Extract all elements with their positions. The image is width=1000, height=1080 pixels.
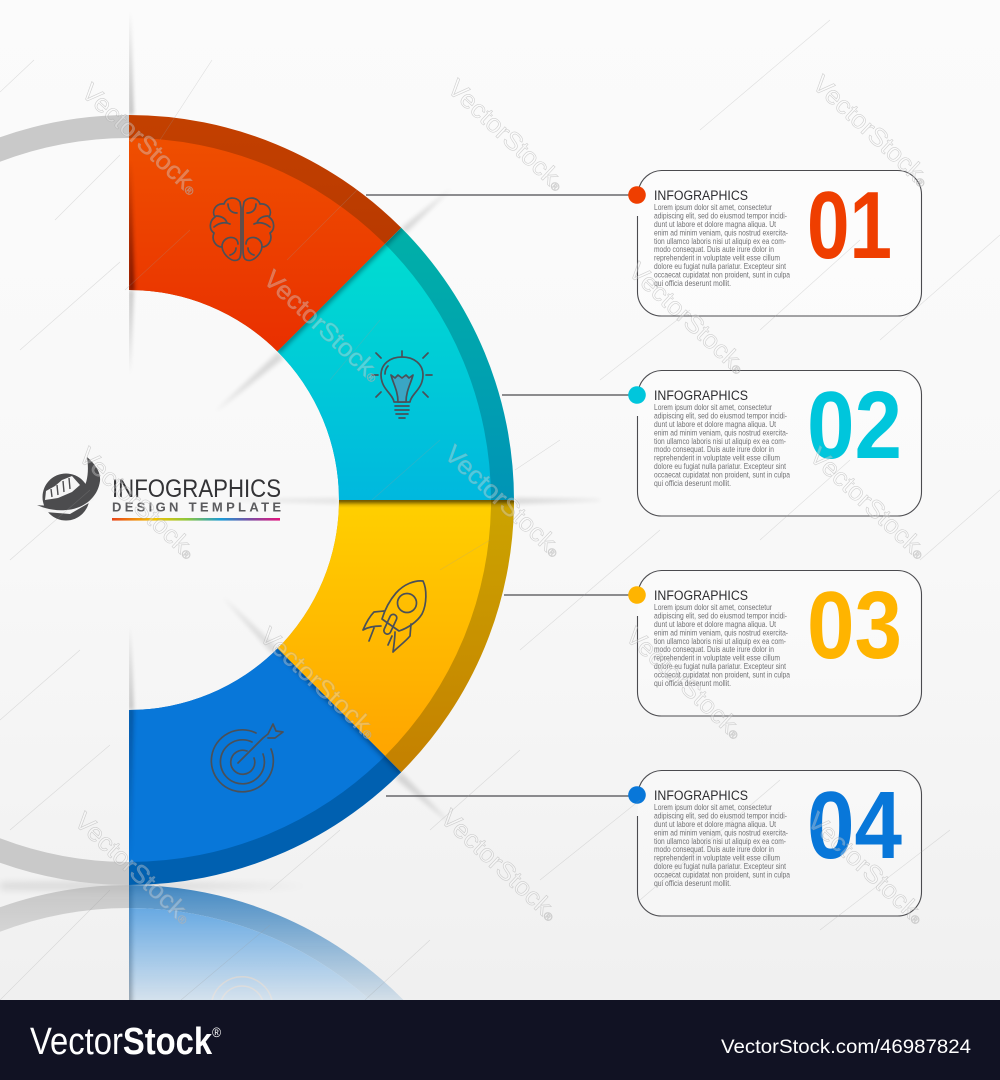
card 03 dot bbox=[628, 586, 646, 604]
card 01 body text: qui officia deserunt mollit. bbox=[654, 278, 731, 288]
card 01 body text: dunt ut labore et dolore magna aliqua. Ut bbox=[654, 219, 776, 229]
watermarks: VectorStock® bbox=[804, 442, 933, 565]
watermarks: VectorStock® bbox=[802, 807, 931, 930]
card 03 number: 03 bbox=[807, 572, 902, 679]
card 01 body text: enim ad minim veniam, quis nostrud exercita- bbox=[654, 227, 788, 237]
card 02 body text: Lorem ipsum dolor sit amet, consectetur bbox=[654, 402, 772, 412]
watermarks: VectorStock® bbox=[76, 78, 205, 201]
footer bar bbox=[0, 1000, 1000, 1080]
card 01 body text bbox=[654, 202, 790, 288]
card 02 body text: adipiscing elit, sed do eiusmod tempor incidi- bbox=[654, 411, 787, 421]
rainbow bar bbox=[112, 518, 280, 521]
card 02 body text bbox=[654, 402, 790, 488]
card 03 body text: tion ullamco laboris nisi ut aliquip ex ea com- bbox=[654, 636, 786, 646]
card 01 number: 01 bbox=[807, 172, 892, 279]
panel: card 01 bbox=[628, 170, 922, 316]
panel: card 03 bbox=[628, 570, 922, 716]
connector lines bbox=[366, 195, 632, 796]
card 04 dot bbox=[628, 786, 646, 804]
card 04 body text: dolore eu fugiat nulla pariatur. Excepteur sint bbox=[654, 861, 786, 871]
card 04 body text: tion ullamco laboris nisi ut aliquip ex ea com- bbox=[654, 836, 786, 846]
card 01 body text: reprehenderit in voluptate velit esse cillum bbox=[654, 253, 780, 263]
card 04 heading: INFOGRAPHICS bbox=[654, 788, 748, 803]
card 03 body text: dolore eu fugiat nulla pariatur. Excepteur sint bbox=[654, 661, 786, 671]
watermarks: VectorStock® bbox=[69, 807, 198, 930]
decorative shadow streaks bbox=[0, 10, 600, 1015]
card 04 body text: modo consequat. Duis aute irure dolor in bbox=[654, 844, 774, 854]
segment 4: blue bbox=[129, 648, 401, 885]
card 03 body text bbox=[654, 602, 790, 688]
card 03 body text: enim ad minim veniam, quis nostrud exercita- bbox=[654, 627, 788, 637]
card 02 body text: qui officia deserunt mollit. bbox=[654, 478, 731, 488]
card 03 body text: adipiscing elit, sed do eiusmod tempor incidi- bbox=[654, 611, 787, 621]
footer logo: ® bbox=[212, 1024, 222, 1040]
card 01 body text: modo consequat. Duis aute irure dolor in bbox=[654, 244, 774, 254]
card 02 outline bbox=[638, 370, 922, 516]
card 01 body text: tion ullamco laboris nisi ut aliquip ex ea com- bbox=[654, 236, 786, 246]
watermarks: VectorStock® bbox=[807, 70, 936, 193]
footer logo: VectorStock bbox=[30, 1021, 226, 1063]
card 04 body text: Lorem ipsum dolor sit amet, consectetur bbox=[654, 802, 772, 812]
card 03 body text: modo consequat. Duis aute irure dolor in bbox=[654, 644, 774, 654]
card 01 dot bbox=[628, 186, 646, 204]
card 03 body text: occaecat cupidatat non proident, sunt in culpa bbox=[654, 669, 790, 679]
panel: card 04 bbox=[628, 770, 922, 916]
watermarks: VectorStock® bbox=[442, 74, 571, 197]
watermarks: VectorStock® bbox=[254, 622, 383, 745]
card 02 body text: reprehenderit in voluptate velit esse cillum bbox=[654, 453, 780, 463]
footer image id: VectorStock.com/46987824 bbox=[721, 1037, 971, 1058]
card 02 dot bbox=[628, 386, 646, 404]
card 04 body text bbox=[654, 802, 790, 888]
card 03 body text: dunt ut labore et dolore magna aliqua. Ut bbox=[654, 619, 776, 629]
segment 3: yellow bbox=[278, 497, 520, 772]
card 04 body text: adipiscing elit, sed do eiusmod tempor incidi- bbox=[654, 811, 787, 821]
card 04 number: 04 bbox=[807, 772, 902, 879]
icon: target with arrow bbox=[211, 724, 283, 792]
watermarks: VectorStock® bbox=[623, 257, 752, 380]
card 04 body text: occaecat cupidatat non proident, sunt in culpa bbox=[654, 869, 790, 879]
card 01 body text: dolore eu fugiat nulla pariatur. Excepteur sint bbox=[654, 261, 786, 271]
card 03 body text: reprehenderit in voluptate velit esse cillum bbox=[654, 653, 780, 663]
mirrored reflection of the ring bbox=[0, 885, 404, 1000]
watermarks bbox=[69, 70, 936, 930]
icon: rocket bbox=[363, 581, 426, 652]
card 01 body text: adipiscing elit, sed do eiusmod tempor incidi- bbox=[654, 211, 787, 221]
card 02 body text: modo consequat. Duis aute irure dolor in bbox=[654, 444, 774, 454]
logo title: INFOGRAPHICS bbox=[112, 475, 281, 503]
card 01 heading: INFOGRAPHICS bbox=[654, 188, 748, 203]
icon: light bulb bbox=[372, 351, 432, 418]
card 02 number: 02 bbox=[807, 372, 902, 479]
card 03 outline bbox=[638, 570, 922, 716]
watermarks: VectorStock® bbox=[258, 265, 387, 388]
card 02 body text: occaecat cupidatat non proident, sunt in culpa bbox=[654, 469, 790, 479]
card 02 body text: dolore eu fugiat nulla pariatur. Excepteur sint bbox=[654, 461, 786, 471]
card 04 outline bbox=[638, 770, 922, 916]
card 02 body text: tion ullamco laboris nisi ut aliquip ex ea com- bbox=[654, 436, 786, 446]
card 04 body text: dunt ut labore et dolore magna aliqua. Ut bbox=[654, 819, 776, 829]
card 04 body text: enim ad minim veniam, quis nostrud exercita- bbox=[654, 827, 788, 837]
card 02 body text: enim ad minim veniam, quis nostrud exercita- bbox=[654, 427, 788, 437]
decorative gray ring on the left bbox=[0, 115, 129, 885]
card 01 body text: Lorem ipsum dolor sit amet, consectetur bbox=[654, 202, 772, 212]
infographic ring bbox=[129, 115, 520, 885]
segment 1: red bbox=[129, 115, 401, 352]
logo emblem bbox=[37, 457, 100, 520]
watermarks: VectorStock® bbox=[73, 442, 202, 565]
logo bbox=[37, 457, 281, 521]
card 02 heading: INFOGRAPHICS bbox=[654, 388, 748, 403]
card 03 heading: INFOGRAPHICS bbox=[654, 588, 748, 603]
icon: brain bbox=[210, 198, 274, 260]
watermarks: VectorStock® bbox=[620, 622, 749, 745]
card 02 body text: dunt ut labore et dolore magna aliqua. Ut bbox=[654, 419, 776, 429]
watermarks: VectorStock® bbox=[435, 804, 564, 927]
logo subtitle: DESIGN TEMPLATE bbox=[112, 500, 281, 514]
card 03 body text: Lorem ipsum dolor sit amet, consectetur bbox=[654, 602, 772, 612]
card 01 outline bbox=[638, 170, 922, 316]
watermarks: VectorStock® bbox=[439, 440, 568, 563]
segment 2: cyan bbox=[278, 228, 514, 500]
card 04 body text: qui officia deserunt mollit. bbox=[654, 878, 731, 888]
card 01 body text: occaecat cupidatat non proident, sunt in culpa bbox=[654, 269, 790, 279]
card 04 body text: reprehenderit in voluptate velit esse cillum bbox=[654, 853, 780, 863]
panel: card 02 bbox=[628, 370, 922, 516]
card 03 body text: qui officia deserunt mollit. bbox=[654, 678, 731, 688]
